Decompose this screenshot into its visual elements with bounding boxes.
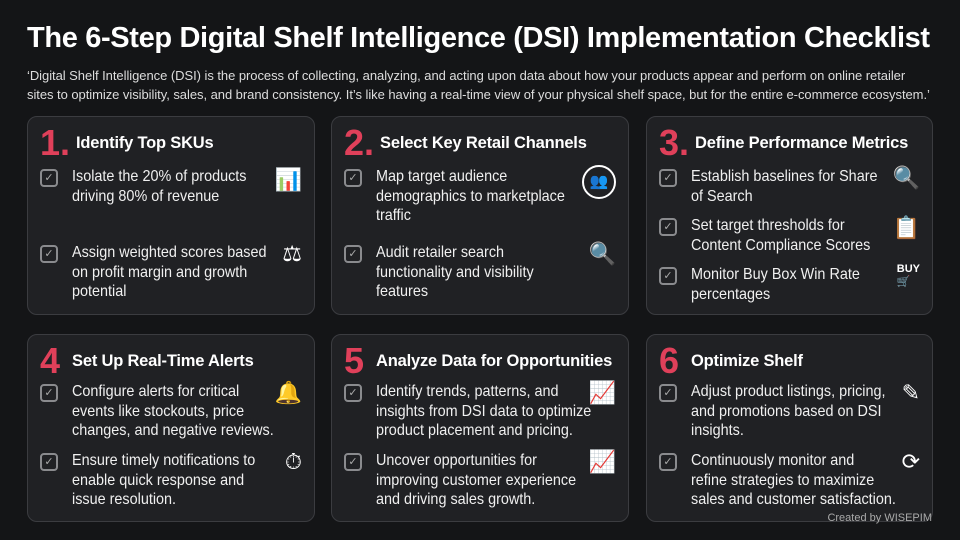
- icon: bell: 🔔: [275, 380, 302, 405]
- heading 6: Optimize Shelf: [691, 352, 803, 370]
- item 3a: ✓: [663, 172, 673, 184]
- item 4a: Configure alerts for critical: [72, 383, 239, 400]
- item 3b: Content Compliance Scores: [691, 236, 870, 254]
- item 5a: Identify trends, patterns, and: [376, 383, 559, 400]
- item 2b: [344, 244, 534, 300]
- item 5a: [344, 383, 591, 439]
- heading 6: 6: [659, 340, 679, 381]
- item 2b: features: [376, 283, 428, 300]
- item 4b: ✓: [44, 456, 54, 468]
- item 5b: Uncover opportunities for: [376, 452, 537, 469]
- item 1b: ✓: [44, 248, 54, 260]
- item 3b: Set target thresholds for: [691, 217, 845, 234]
- item 5b: ✓: [348, 456, 358, 468]
- item 5a: insights from DSI data to optimize: [376, 402, 591, 420]
- item 3b: ✓: [663, 221, 673, 233]
- item 2b: functionality and visibility: [376, 264, 534, 280]
- credit: Created by WISEPIM: [827, 512, 932, 524]
- subtitle: [27, 68, 930, 102]
- icon: analytics: 📈: [589, 380, 616, 405]
- item 2a: traffic: [376, 207, 411, 224]
- item 6b: ✓: [663, 456, 673, 468]
- item 3a: [659, 168, 878, 204]
- item 3c: [659, 266, 860, 302]
- panel: step 2: [331, 116, 629, 315]
- item 1b: potential: [72, 283, 126, 300]
- item 3c: Monitor Buy Box Win Rate: [691, 266, 860, 283]
- icon: audience: 👥: [590, 173, 608, 190]
- item 4a: changes, and negative reviews.: [72, 422, 274, 439]
- item 4b: issue resolution.: [72, 491, 176, 508]
- heading 2: [344, 122, 587, 163]
- heading 1: Identify Top SKUs: [76, 134, 214, 152]
- item 2b: Audit retailer search: [376, 244, 504, 261]
- item 4a: [40, 383, 274, 439]
- item 1a: ✓: [44, 172, 54, 184]
- icon: chart calculator: 📊: [275, 167, 302, 192]
- item 1b: Assign weighted scores based: [72, 244, 267, 261]
- icon: search: 🔍: [589, 241, 616, 266]
- item 6b: Continuously monitor and: [691, 452, 854, 469]
- item 3c: ✓: [663, 270, 673, 282]
- item 3a: of Search: [691, 188, 753, 204]
- icon: buy: 🛒: [897, 276, 910, 288]
- item 6b: refine strategies to maximize: [691, 472, 874, 488]
- item 3a: Establish baselines for Share: [691, 168, 878, 185]
- icon: buy: BUY: [897, 263, 920, 275]
- panel: step 3: [646, 116, 933, 315]
- icon: magnifier: 🔍: [893, 165, 920, 190]
- icon: refresh: ⟳: [902, 449, 920, 474]
- heading 5: Analyze Data for Opportunities: [376, 352, 612, 370]
- heading 3: 3.: [659, 122, 689, 163]
- item 4a: events like stockouts, price: [72, 402, 244, 420]
- heading 4: [40, 340, 254, 381]
- heading 6: [659, 340, 804, 381]
- subtitle: sites to optimize visibility, sales, and brand consistency. It’s like having a real-time view of your physical shelf space, but for the entire e-commerce ecosystem.’: [27, 87, 930, 102]
- item 5b: improving customer experience: [376, 472, 576, 488]
- item 4a: ✓: [44, 387, 54, 399]
- item 2a: ✓: [348, 172, 358, 184]
- item 5b: [344, 452, 576, 508]
- icon: clipboard: 📋: [893, 215, 920, 240]
- item 3c: percentages: [691, 286, 770, 302]
- item 4b: enable quick response and: [72, 472, 244, 488]
- heading 5: 5: [344, 340, 364, 381]
- item 2a: [344, 168, 565, 224]
- title: The 6-Step Digital Shelf Intelligence (DSI) Implementation Checklist: [27, 22, 930, 54]
- heading 2: Select Key Retail Channels: [380, 134, 587, 152]
- icon: buy: [897, 263, 920, 288]
- item 3b: [659, 217, 870, 254]
- panel: step 4: [27, 334, 315, 522]
- icon: scale: ⚖: [282, 241, 302, 266]
- item 5a: ✓: [348, 387, 358, 399]
- item 1a: driving 80% of revenue: [72, 188, 219, 204]
- icon: audience: [582, 165, 616, 199]
- item 4b: [40, 452, 255, 508]
- item 6a: ✓: [663, 387, 673, 399]
- panel: step 1: [27, 116, 315, 315]
- item 4b: Ensure timely notifications to: [72, 452, 255, 469]
- panel: step 6: [646, 334, 933, 522]
- heading 1: [40, 122, 214, 163]
- icon: stopwatch: ⏱: [285, 449, 302, 474]
- item 2a: demographics to marketplace: [376, 188, 565, 204]
- item 5b: and driving sales growth.: [376, 491, 535, 508]
- item 1a: Isolate the 20% of products: [72, 168, 247, 185]
- item 5a: product placement and pricing.: [376, 422, 573, 439]
- item 1a: [40, 168, 247, 204]
- heading 5: [344, 340, 612, 381]
- item 6b: [659, 452, 896, 508]
- item 6a: [659, 383, 885, 439]
- heading 4: Set Up Real-Time Alerts: [72, 352, 254, 370]
- heading 4: 4: [40, 340, 60, 381]
- item 6a: Adjust product listings, pricing,: [691, 383, 885, 400]
- subtitle: ‘Digital Shelf Intelligence (DSI) is the process of collecting, analyzing, and acting upon data about how your products appear and perform on online retailer: [27, 68, 905, 83]
- icon: pencil: ✎: [902, 380, 920, 405]
- item 2a: Map target audience: [376, 168, 507, 185]
- icon: growth chart: 📈: [589, 449, 616, 474]
- item 1b: on profit margin and growth: [72, 264, 247, 280]
- heading 3: [659, 122, 908, 163]
- item 6a: and promotions based on DSI: [691, 402, 882, 420]
- item 2b: ✓: [348, 248, 358, 260]
- heading 2: 2.: [344, 122, 374, 163]
- panel: step 5: [331, 334, 629, 522]
- heading 3: Define Performance Metrics: [695, 134, 908, 152]
- item 6a: insights.: [691, 422, 744, 439]
- heading 1: 1.: [40, 122, 70, 163]
- item 1b: [40, 244, 267, 300]
- item 6b: sales and customer satisfaction.: [691, 491, 896, 508]
